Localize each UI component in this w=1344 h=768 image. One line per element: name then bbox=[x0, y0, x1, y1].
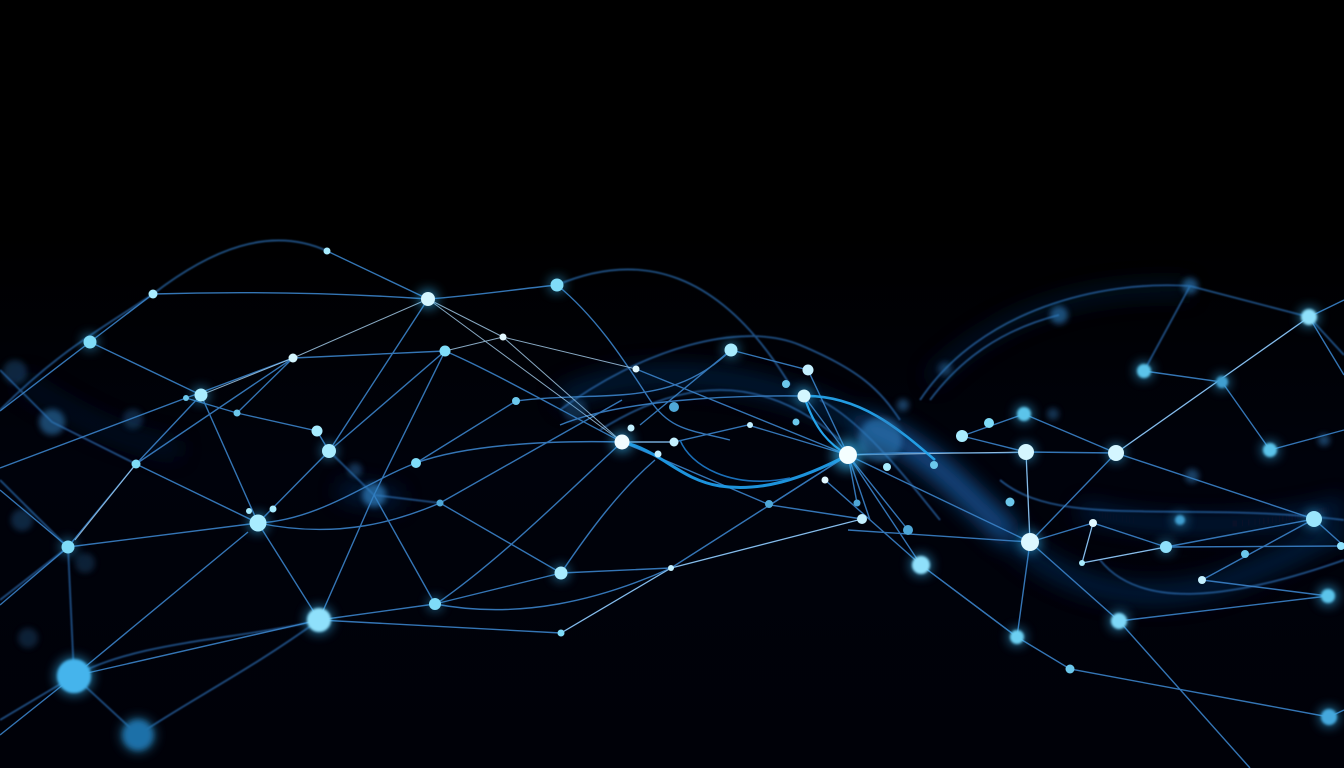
large soft node cores bbox=[57, 309, 1337, 750]
out-of-focus nodes bbox=[3, 278, 1330, 648]
sharp bright nodes bbox=[62, 248, 1344, 674]
dim background links bbox=[0, 240, 1344, 735]
blurred ribbons behind the network bbox=[20, 289, 1344, 594]
node glows bbox=[56, 278, 1338, 752]
bright blue links bbox=[0, 251, 1344, 768]
thin pale links bbox=[75, 299, 1309, 633]
highlighted central curve bbox=[622, 396, 935, 488]
